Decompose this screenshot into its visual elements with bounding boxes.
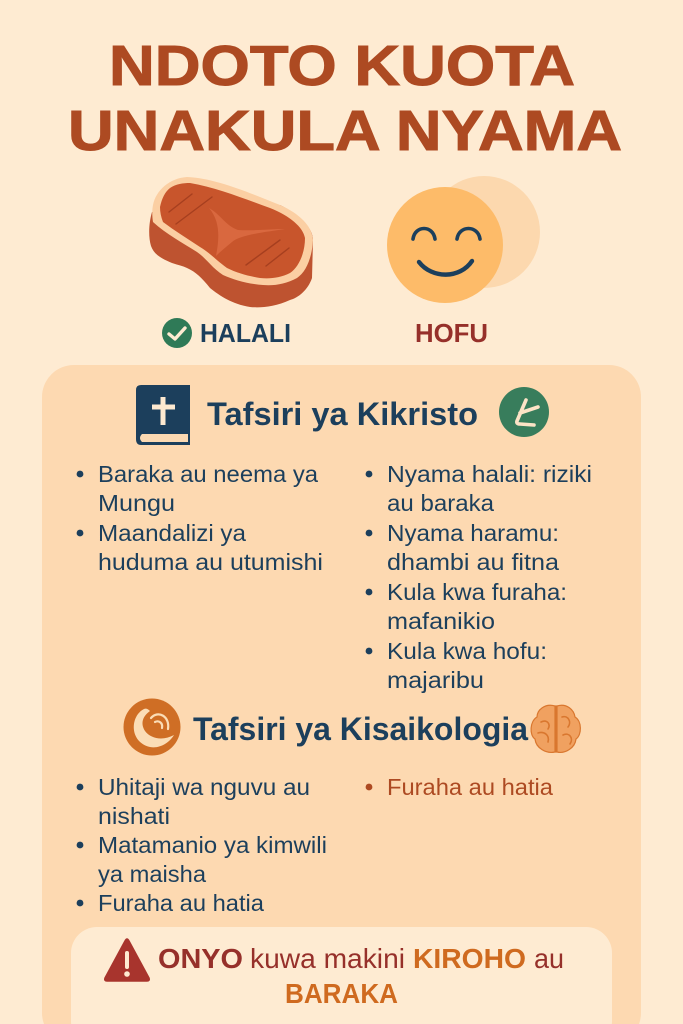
- title: [68, 34, 622, 163]
- callout text: BARAKA: [285, 978, 398, 1009]
- list: psychological left: nishati: [98, 803, 170, 829]
- list: christian left: Maandalizi ya: [98, 520, 247, 546]
- list: christian left: Baraka au neema ya: [98, 461, 319, 487]
- list: psychological left: Matamanio ya kimwili: [98, 832, 327, 858]
- callout text: [158, 943, 564, 1009]
- icon: smiley face: [387, 176, 540, 303]
- list: christian right: [366, 461, 592, 693]
- list: psychological left: Uhitaji wa nguvu au: [98, 774, 310, 800]
- list: christian right: Kula kwa hofu:: [387, 638, 547, 664]
- callout text: kuwa makini: [250, 943, 405, 974]
- icon: green check: [162, 318, 192, 348]
- list: christian right: majaribu: [387, 667, 484, 693]
- icon: steak: [149, 177, 313, 307]
- list: christian right: dhambi au fitna: [387, 549, 560, 575]
- icon: orange swirl: [124, 698, 180, 756]
- list: christian left: Mungu: [98, 490, 175, 516]
- callout text: au: [534, 943, 564, 974]
- callout text: ONYO: [158, 943, 243, 974]
- label: hofu: HOFU: [415, 318, 488, 348]
- list: christian left: huduma au utumishi: [98, 549, 323, 575]
- list: christian left: [77, 461, 323, 575]
- icon: brain: [531, 705, 580, 752]
- list: psychological left: Furaha au hatia: [98, 890, 265, 916]
- heading: psychological interpretation: Tafsiri ya Kisaikologia: [193, 711, 528, 747]
- list: christian right: Nyama halali: riziki: [387, 461, 592, 487]
- title: UNAKULA NYAMA: [68, 99, 622, 163]
- label: halali: HALALI: [200, 318, 291, 348]
- list: christian right: Kula kwa furaha:: [387, 579, 567, 605]
- list: psychological left: [77, 774, 327, 916]
- list: christian right: au baraka: [387, 490, 495, 516]
- list: psychological right: Furaha au hatia: [387, 774, 554, 800]
- title: NDOTO KUOTA: [109, 34, 575, 98]
- list: christian right: mafanikio: [387, 608, 495, 634]
- callout text: KIROHO: [413, 943, 526, 974]
- heading: christian interpretation: Tafsiri ya Kikristo: [207, 396, 478, 432]
- list: psychological left: ya maisha: [98, 861, 207, 887]
- list: christian right: Nyama haramu:: [387, 520, 559, 546]
- icon: green badge: [499, 387, 549, 437]
- icon: bible: [136, 385, 190, 445]
- icon: warning triangle: [105, 939, 149, 981]
- panel: interpretations: [42, 365, 641, 1024]
- callout: warning: [71, 927, 612, 1024]
